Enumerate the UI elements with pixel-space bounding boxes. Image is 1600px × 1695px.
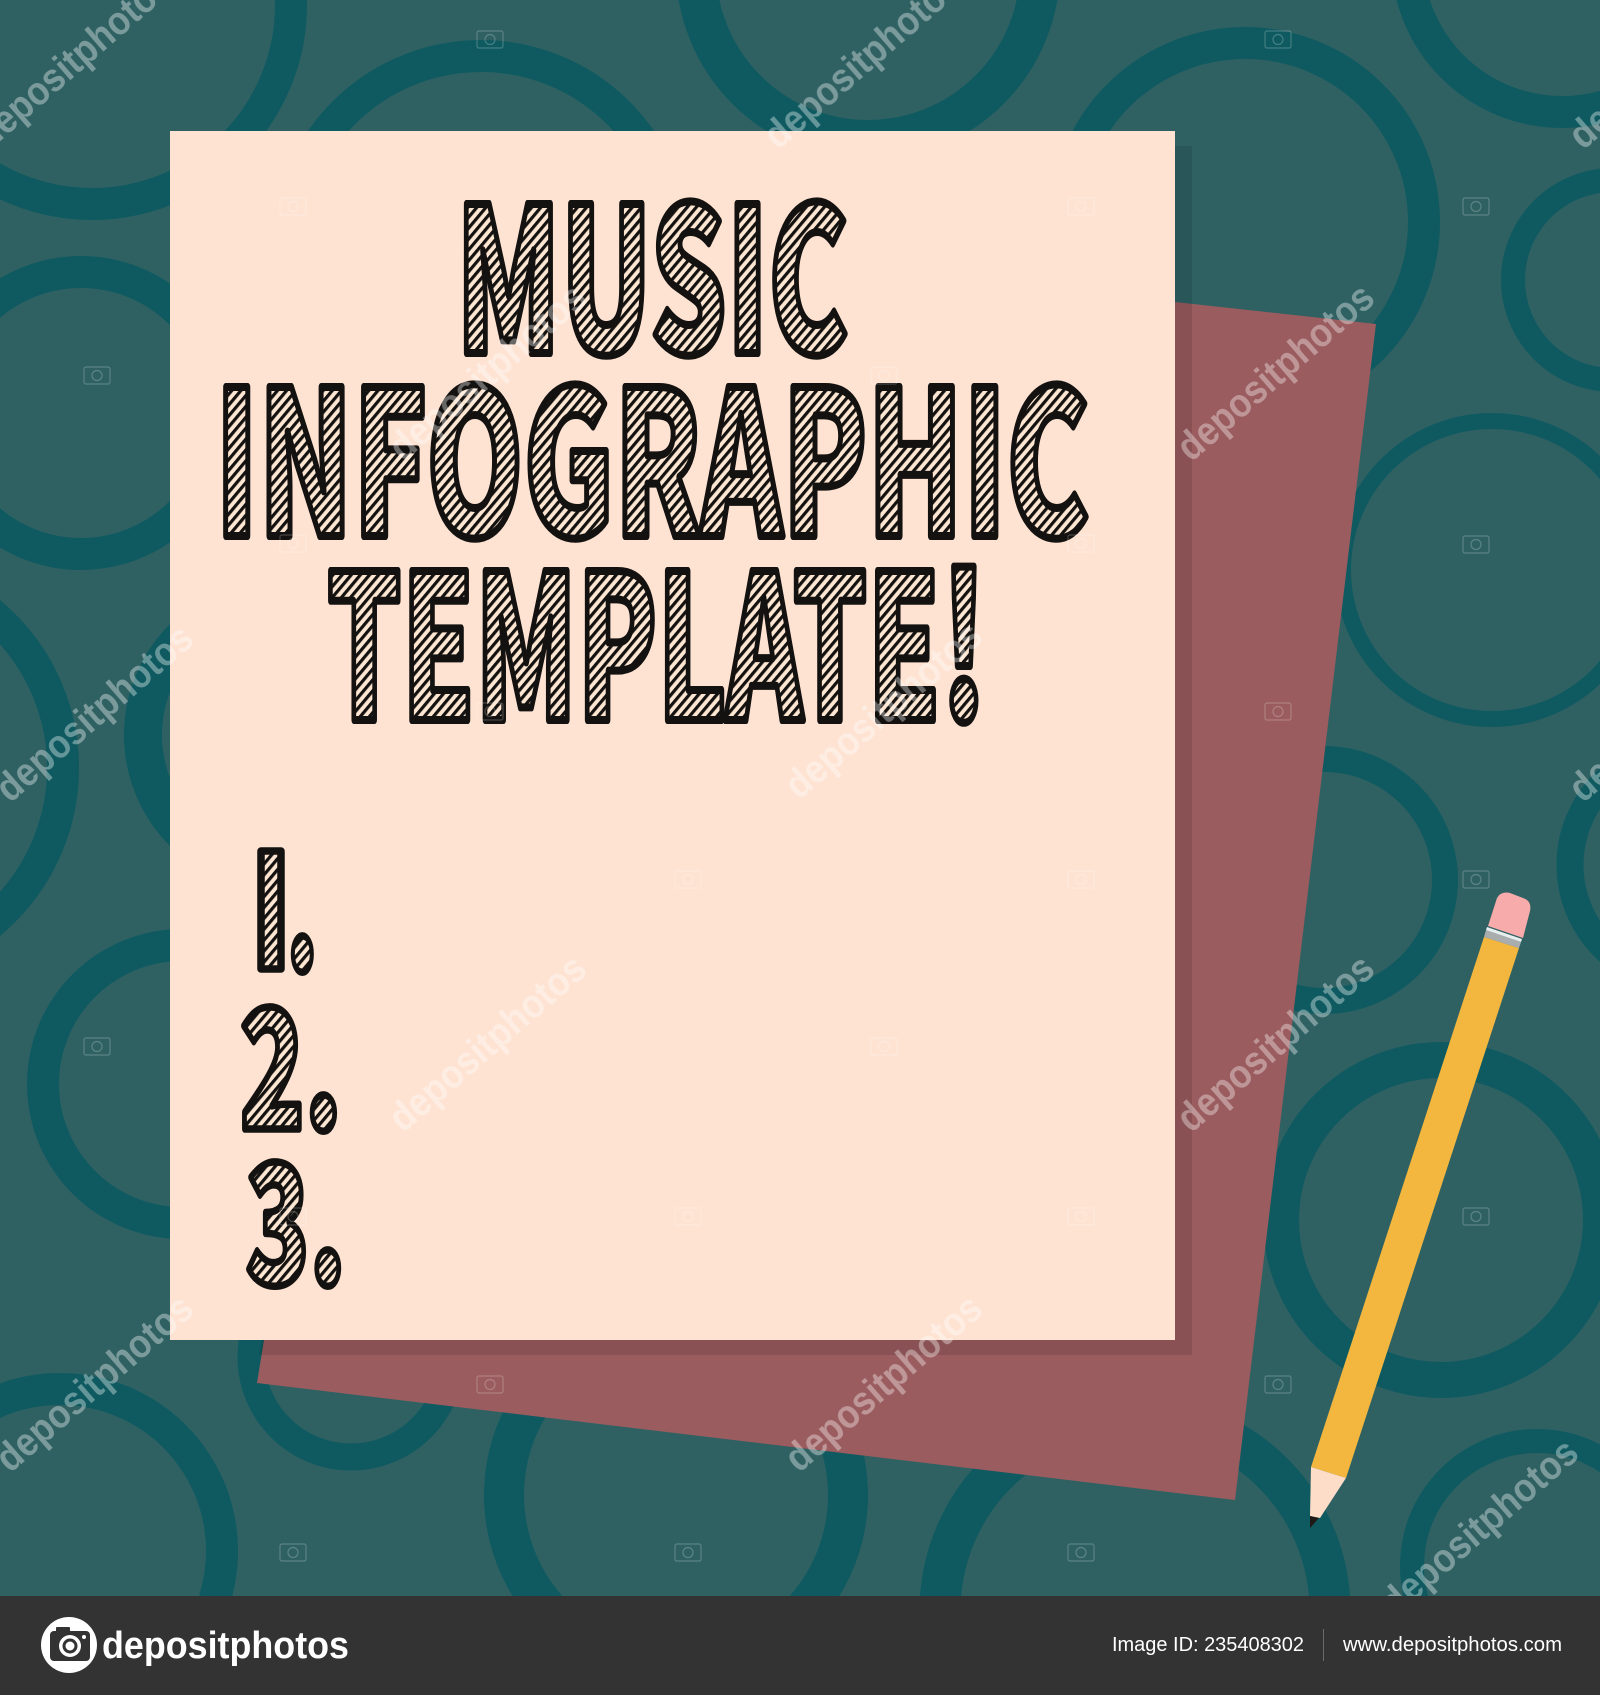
pencil wood tip (1310, 1467, 1346, 1518)
list number 2: 2. (240, 938, 342, 1177)
watermarks: depositphotos: depositphotos (1168, 275, 1383, 469)
title line: MUSIC: MUSIC (456, 121, 848, 411)
title (215, 121, 1089, 778)
footer image ID: Image ID: 235408302 (1112, 1634, 1304, 1656)
list number 1 (257, 847, 314, 976)
pencil lead (1310, 1516, 1319, 1528)
title line: TEMPLATE!: TEMPLATE! (327, 488, 987, 778)
watermarks: depositphotos: depositphotos (776, 1286, 991, 1480)
footer logo wordmark: depositphotos (102, 1625, 349, 1667)
pencil (1310, 893, 1530, 1528)
pencil body (1311, 937, 1519, 1478)
footer website: www.depositphotos.com (1342, 1634, 1562, 1656)
pencil band highlight (1486, 927, 1522, 942)
watermarks: depositphotos: depositphotos (776, 613, 991, 807)
title line: INFOGRAPHIC: INFOGRAPHIC (215, 304, 1089, 594)
pencil metal band (1484, 930, 1521, 948)
watermarks: depositphotos: depositphotos (380, 275, 595, 469)
numbered list (241, 847, 342, 1290)
watermarks: depositphotos: depositphotos (380, 946, 595, 1140)
pencil eraser (1488, 893, 1530, 938)
front sheet: cream paper (170, 131, 1175, 1340)
back sheet: maroon paper (257, 302, 1376, 1500)
watermarks: depositphotos: depositphotos (1168, 946, 1383, 1140)
paper shadow (259, 146, 1192, 1355)
list number 1: 1. (232, 779, 318, 1018)
list number 3: 3. (246, 1093, 346, 1332)
footer logo icon: camera in circle (41, 1617, 97, 1673)
footer bar (0, 1596, 1600, 1695)
watermark camera icons (84, 31, 1489, 1561)
